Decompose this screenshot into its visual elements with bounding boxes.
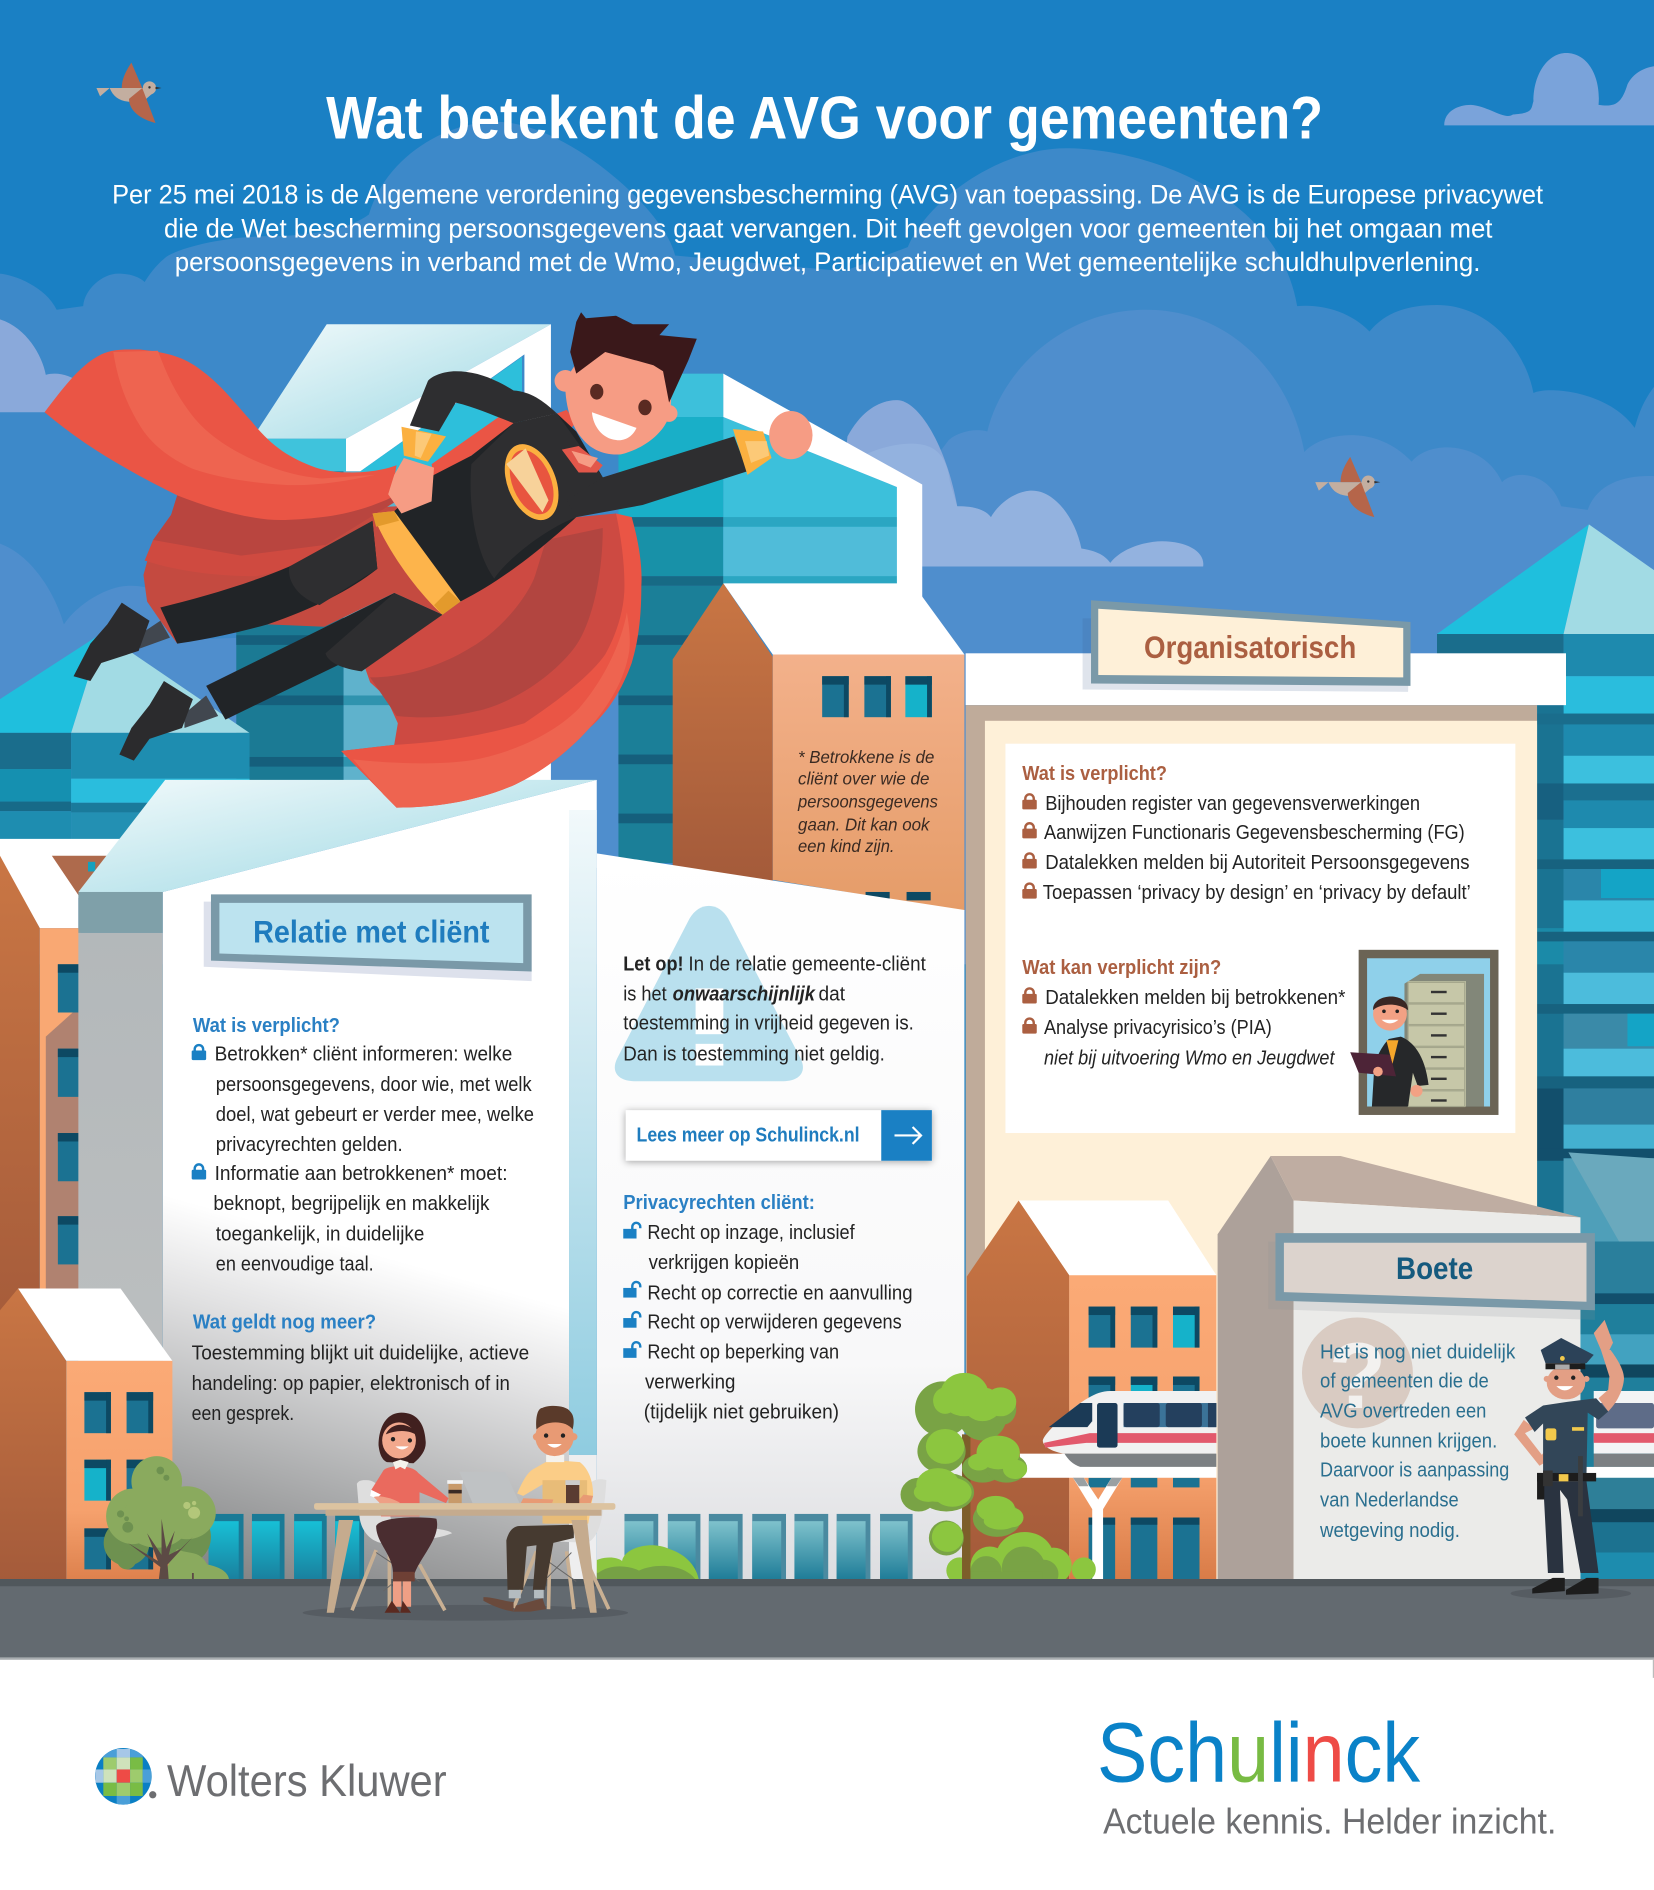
text: privacyrechten: Recht op verwijderen gegevens: [647, 1310, 902, 1333]
text: organisatorisch verplicht: Toepassen ‘privacy by design’ en ‘privacy by default’: [1043, 881, 1471, 904]
sign: boete: Boete: [1396, 1251, 1473, 1286]
sign: relatie met client: Relatie met cliënt: [253, 915, 490, 950]
logo: schulinck: [1097, 1706, 1556, 1841]
text: wat geldt nog meer: Toestemming blijkt uit duidelijke, actieve: [192, 1342, 529, 1365]
text: boete: van Nederlandse: [1320, 1489, 1459, 1512]
laptop and cups: [447, 1472, 580, 1503]
glass row left: [209, 1514, 364, 1581]
text: organisatorisch verplicht: Wat kan verplicht zijn?: [1022, 956, 1221, 979]
panel: relatie met client building: [78, 780, 597, 1581]
text: boete: boete kunnen krijgen.: [1320, 1430, 1497, 1453]
orange house centre: [673, 583, 964, 911]
hero: head: [555, 312, 697, 455]
intro text: die de Wet bescherming persoonsgegevens gaat vervangen. Dit heeft gevolgen voor gemeenten bij het omgaan met: [164, 213, 1493, 243]
light cloud centre: [832, 400, 1203, 567]
far left tower: [0, 633, 250, 840]
text: relatie verplicht: en eenvoudige taal.: [216, 1252, 374, 1275]
logo: schulinck: Schulinck: [1097, 1706, 1421, 1800]
text: let op: [623, 952, 926, 1066]
illustration: woman and man at table: [303, 1406, 628, 1621]
panel: central white building: [597, 853, 964, 1581]
text: relatie verplicht: Informatie aan betrokkenen* moet:: [215, 1162, 508, 1185]
illustration: man at filing cabinet: [1350, 950, 1498, 1115]
glass row right: [624, 1514, 913, 1581]
sign: boete: [1268, 1233, 1595, 1320]
intro text: persoonsgegevens in verband met de Wmo, Jeugdwet, Participatiewet en Wet gemeentelijke schuldhulpverlening.: [175, 247, 1480, 277]
text: relatie verplicht: doel, wat gebeurt er verder mee, welke: [216, 1103, 534, 1126]
footnote: gaan. Dit kan ook: [798, 814, 931, 834]
bird top left: [96, 63, 162, 123]
footnote: persoonsgegevens: [797, 792, 938, 812]
text: wat geldt nog meer: Wat geldt nog meer?: [193, 1310, 376, 1333]
text: boete: wetgeving nodig.: [1319, 1519, 1460, 1542]
sign: relatie met client: [204, 894, 532, 981]
tree left: [104, 1456, 229, 1597]
text: relatie verplicht: Betrokken* cliënt informeren: welke: [215, 1043, 512, 1066]
title: Wat betekent de AVG voor gemeenten?: [326, 84, 1323, 152]
front cloud layer left: [0, 544, 627, 964]
woman: [370, 1413, 448, 1613]
hero: body and legs: [74, 371, 813, 761]
road: [0, 1579, 1654, 1659]
footnote: een kind zijn.: [798, 836, 895, 856]
footnote: * Betrokkene is de: [798, 747, 935, 767]
text: privacyrechten: [623, 1191, 913, 1424]
text: boete: [1319, 1340, 1516, 1542]
text: boete: Daarvoor is aanpassing: [1320, 1459, 1509, 1482]
logo: wolters kluwer: Wolters Kluwer: [167, 1757, 447, 1806]
front left house: [0, 1289, 172, 1591]
text: boete: AVG overtreden een: [1320, 1400, 1486, 1422]
text: organisatorisch verplicht: Aanwijzen Functionaris Gegevensbescherming (FG): [1044, 821, 1465, 844]
footnote: cliënt over wie de: [798, 769, 930, 789]
orange house right: [967, 1201, 1216, 1579]
text: wat geldt nog meer: een gesprek.: [192, 1402, 294, 1425]
text: let op: In de relatie gemeente-cliënt: [688, 952, 926, 975]
text: organisatorisch verplicht: Datalekken melden bij betrokkenen*: [1045, 986, 1345, 1009]
text: wat geldt nog meer: handeling: op papier, elektronisch of in: [192, 1372, 510, 1395]
question mark circle: [1302, 1317, 1413, 1428]
text: privacyrechten: Privacyrechten cliënt:: [623, 1191, 815, 1214]
text: privacyrechten: (tijdelijk niet gebruiken): [644, 1401, 839, 1424]
text: let op: Let op!: [623, 952, 684, 975]
bushes centre: [562, 1545, 699, 1581]
text: organisatorisch verplicht: Bijhouden register van gegevensverwerkingen: [1045, 792, 1420, 815]
intro text: [112, 180, 1544, 277]
text: relatie verplicht: Wat is verplicht?: [193, 1014, 340, 1037]
monorail train: [1020, 1391, 1216, 1579]
sign: organisatorisch: Organisatorisch: [1144, 630, 1356, 665]
bird right: [1315, 457, 1380, 517]
sign: organisatorisch: [1083, 600, 1410, 692]
text: privacyrechten: Recht op correctie en aanvulling: [647, 1281, 913, 1304]
central teal tower: [618, 374, 922, 863]
illustration: police officer: [1511, 1320, 1631, 1600]
chairs: [352, 1479, 609, 1610]
button: lees meer: [626, 1110, 932, 1161]
footnote: [797, 747, 938, 856]
text: organisatorisch verplicht: Wat is verplicht?: [1022, 762, 1167, 785]
button: lees meer: Lees meer op Schulinck.nl: [637, 1123, 860, 1146]
text: let op: toestemming in vrijheid gegeven is.: [623, 1011, 914, 1034]
logo: schulinck: Actuele kennis. Helder inzicht.: [1103, 1800, 1556, 1841]
text: relatie verplicht: toegankelijk, in duidelijke: [216, 1222, 424, 1245]
question mark circle: ?: [1329, 1323, 1386, 1428]
text: privacyrechten: Recht op beperking van: [647, 1340, 839, 1363]
text: wat geldt nog meer: [192, 1310, 529, 1425]
text: let op: dat: [819, 982, 845, 1005]
train behind police officer: [1580, 1391, 1654, 1478]
white text panel: [1005, 744, 1515, 1133]
tall building behind hero: [236, 324, 551, 787]
white footer background: [0, 1657, 1654, 1890]
back cloud layer: [0, 122, 1654, 964]
text: boete: of gemeenten die de: [1320, 1369, 1489, 1392]
warning triangle: [615, 906, 803, 1081]
building: boete: [1218, 1156, 1580, 1579]
hero: cape back: [45, 349, 642, 808]
text: relatie verplicht: persoonsgegevens, door wie, met welk: [216, 1073, 532, 1096]
text: organisatorisch verplicht: Datalekken melden bij Autoriteit Persoonsgegevens: [1045, 851, 1470, 874]
text: let op: onwaarschijnlijk: [673, 982, 816, 1005]
man: [483, 1406, 593, 1612]
text: let op: is het: [623, 982, 667, 1005]
text: relatie verplicht: [192, 1014, 534, 1275]
front cloud layer right: [844, 310, 1654, 964]
light cloud top right: [1444, 53, 1654, 125]
text: privacyrechten: Recht op inzage, inclusief: [647, 1221, 855, 1244]
tree right: [901, 1373, 1096, 1590]
text: boete: Het is nog niet duidelijk: [1320, 1340, 1516, 1363]
panel: organisatorisch building: [966, 653, 1566, 1585]
back left building: [0, 839, 121, 1356]
light cloud left: [0, 319, 108, 412]
text: privacyrechten: verwerking: [645, 1371, 735, 1394]
text: organisatorisch verplicht: [1022, 762, 1471, 1069]
text: organisatorisch verplicht: Analyse privacyrisico’s (PIA): [1044, 1016, 1272, 1039]
text: organisatorisch verplicht: niet bij uitvoering Wmo en Jeugdwet: [1044, 1046, 1336, 1069]
table: [314, 1503, 615, 1613]
intro text: Per 25 mei 2018 is de Algemene verordening gegevensbescherming (AVG) van toepassing. De AVG is de Europese privacywet: [112, 180, 1544, 210]
logo: wolters kluwer: [94, 1748, 447, 1806]
text: let op: Dan is toestemming niet geldig.: [623, 1043, 885, 1066]
text: privacyrechten: verkrijgen kopieën: [649, 1251, 799, 1274]
text: relatie verplicht: privacyrechten gelden.: [216, 1133, 403, 1156]
text: relatie verplicht: beknopt, begrijpelijk en makkelijk: [213, 1192, 490, 1215]
right tower: [1437, 524, 1654, 1585]
